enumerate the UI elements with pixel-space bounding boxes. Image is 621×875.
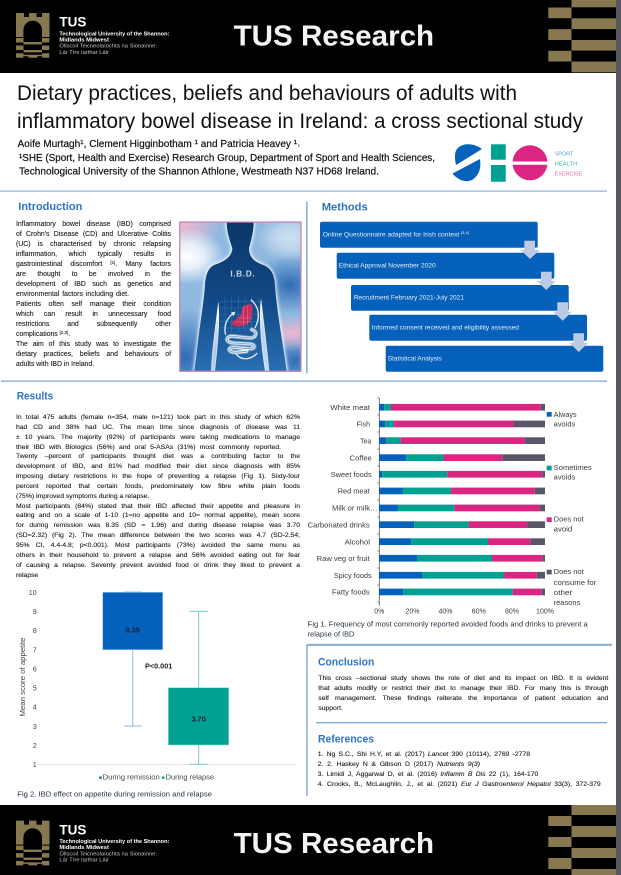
text: results body: In total 475 adults (female n=354, male n=121) took part in this study of which 62%	[16, 414, 300, 421]
bar: tea	[379, 437, 545, 444]
bar labels: Tea	[360, 436, 372, 446]
banner heading: TUS Research	[234, 828, 434, 860]
x axis labels: 20%	[405, 608, 420, 615]
x axis labels	[374, 608, 554, 615]
heading: Methods: Methods	[322, 202, 368, 214]
text: introduction body: are thought to be involved in the	[16, 271, 171, 278]
step 3: recruitment	[351, 285, 569, 311]
text: results body: of causing a relapse. Seventy prevent avoided food or drink they liked to prevent a	[16, 562, 300, 569]
bar: carbonated drinks	[379, 521, 545, 528]
text: results body: others in their household to prevent a relapse and 56% avoided eating out for fear	[16, 552, 300, 559]
heading: References: References	[318, 734, 374, 746]
authors and affiliation	[18, 139, 435, 178]
text: introduction body: which can result in unnecessary food	[16, 311, 171, 318]
chart legend: avoids	[554, 420, 575, 429]
x axis labels: 0%	[374, 608, 384, 615]
icon: TUS castle logo	[16, 13, 49, 58]
text: introduction body: Patients often self manage their condition	[16, 301, 171, 308]
x axis	[38, 764, 296, 769]
authors and affiliation: Aoife Murtagh¹, Clement Higginbotham ¹ and Patricia Heavey ¹˒	[18, 139, 300, 150]
step 2: ethical approval	[337, 253, 554, 279]
icon: TUS castle logo	[16, 821, 49, 865]
text: results body: 95% CI, 4.4-4.8; p<0.001). Most participants (73%) avoided the same menu as	[16, 542, 300, 549]
y axis labels and title: 6	[33, 664, 37, 674]
chart legend: During remission	[103, 773, 160, 782]
figure 2 caption: Fig 2. IBD effect on appetite during remission and relapse	[17, 792, 212, 799]
text: results body: eating and on a scale of 1-10 (1=no appetite and 10= normal appetite), mean score	[16, 512, 300, 519]
text: introduction body: gastrointestinal discomfort [1]. Many factors	[16, 260, 171, 268]
chart: figure 2 appetite box plot	[17, 588, 296, 799]
x axis labels: 40%	[438, 608, 453, 615]
panel: references	[306, 722, 607, 796]
bar: alcohol	[379, 538, 545, 545]
authors and affiliation: ¹SHE (Sport, Health and Exercise) Research Group, Department of Sport and Health Sciences,	[19, 153, 435, 164]
chart legend: consume for	[554, 578, 597, 587]
y axis labels and title: 7	[33, 646, 37, 654]
heading: Conclusion: Conclusion	[318, 657, 374, 669]
chart legend: During relapse	[166, 773, 214, 782]
step 5: statistical analysis	[386, 346, 603, 372]
bar: fatty foods	[379, 589, 545, 595]
footer banner	[0, 805, 616, 875]
text: introduction body: Inflammatory bowel disease (IBD) comprised	[16, 221, 171, 228]
text: results body: percent reported that certain foods, predominately low fibre white plain foods	[16, 483, 300, 490]
text: introduction body: The aim of this study was to investigate the	[16, 341, 171, 348]
arrow: step 3 to 4	[553, 302, 572, 321]
text: reference list	[318, 751, 601, 788]
bar labels: Spicy foods	[334, 571, 372, 580]
text: results body: for during remission was 8.35 (SD = 1.96) and during disease relapse was 3.70	[16, 522, 300, 529]
step 5: statistical analysis: Statistical Analysis	[388, 356, 442, 363]
figure 1 caption	[308, 622, 588, 639]
y axis labels and title: Mean score of appetite	[18, 637, 27, 717]
text: reference list: 4. Crooks, B., McLaughlin, J., et al. (2021) Eur J Gastroenterol Hepatol 33(3), 372-379	[318, 781, 601, 788]
text: conclusion body: that adults modify or restrict their diet to manage their IBD. For many this is through	[318, 685, 608, 692]
TUS logo wordmark: Lár Tíre Iarthar Láir	[59, 858, 109, 864]
chart: figure 1 avoided foods stacked bars	[308, 398, 597, 639]
bar labels: Fish	[357, 420, 370, 428]
bar: raw veg or fruit	[379, 555, 545, 562]
TUS logo wordmark: Midlands Midwest	[59, 37, 109, 43]
chart legend	[547, 410, 597, 607]
text: results body	[16, 414, 300, 578]
text: conclusion body	[318, 675, 608, 712]
text: results body: (SD=2.32) (Fig 2). The mean difference between the two scores was 4.7 (SD-2.54;	[16, 532, 300, 539]
panel: conclusion	[306, 643, 612, 723]
icon: SHE logo	[452, 144, 583, 182]
text: reference list: 3. Limidi J, Aggarwal D, et al. (2016) Inflamm B Dis 22 (1), 164-170	[318, 771, 538, 778]
bar: spicy foods	[379, 572, 545, 579]
step 4: informed consent: Informed consent received and eligibility assessed	[372, 325, 519, 332]
text: introduction body: development of IBD such as genetics and	[16, 281, 171, 288]
text: conclusion body: self management. These findings reiterate the importance of patient education and	[318, 695, 608, 702]
bar: red meat	[379, 488, 545, 494]
text: introduction body: dietary practices, beliefs and behaviours of	[16, 351, 171, 358]
text: conclusion body: This cross –sectional study shows the role of diet and its impact on IBD. It is evident	[318, 675, 608, 682]
text: results body: Most participants (84%) stated that their IBD affected their appetite and pleasure in	[16, 503, 300, 510]
poster title	[17, 81, 583, 133]
chart legend: Does not	[554, 567, 584, 576]
banner heading: TUS Research	[234, 20, 434, 52]
text: introduction body: inflammation, which typically results in	[16, 251, 171, 258]
text: introduction body: complications [2,3].	[16, 330, 70, 338]
bar: coffee	[379, 454, 545, 461]
text: results body: (75%) improved symptoms during a relapse.	[16, 493, 149, 500]
step 1: questionnaire: [3,4]	[461, 230, 469, 235]
y axis labels and title: 1	[33, 760, 37, 769]
heading: Introduction: Introduction	[18, 201, 82, 213]
bar: sweet foods	[379, 471, 545, 478]
step 1: questionnaire	[320, 222, 538, 248]
axis line	[378, 398, 379, 606]
box: during remission	[103, 592, 163, 726]
bar labels: Carbonated drinks	[308, 520, 370, 529]
arrow: step 2 to 3	[537, 272, 556, 290]
poster title: inflammatory bowel disease in Ireland: a cross sectional study	[17, 109, 583, 133]
y axis labels and title: 5	[33, 684, 37, 692]
y axis labels and title: 2	[33, 741, 37, 750]
panel: results text	[16, 391, 300, 578]
text: results body: Twenty –percent of participants thought diet was a contributing factor to the	[16, 453, 300, 460]
x axis labels: 60%	[472, 608, 486, 615]
text: results body: had CD and 38% had UC. The mean time since diagnosis of disease was 11	[16, 424, 300, 431]
TUS logo wordmark: TUS	[59, 822, 86, 837]
y axis labels and title	[18, 588, 37, 769]
significance label: P<0.001	[145, 664, 172, 671]
text: reference list: 2. 2. Haskey N & Gibson D (2017) Nutrients 9(3)	[318, 761, 480, 768]
TUS logo wordmark: Technological University of the Shannon:	[59, 839, 170, 845]
bar: fish	[379, 421, 545, 427]
bar: milk or milk products	[379, 505, 545, 511]
box: during remission: 8.35	[126, 626, 140, 635]
authors and affiliation: Technological University of the Shannon Athlone, Westmeath N37 HD68 Ireland.	[19, 167, 379, 178]
text: introduction body: adults with IBD in Ireland.	[16, 361, 94, 368]
box: during relapse: 3.70	[192, 715, 206, 724]
icon: SHE logo: EXERCISE	[555, 172, 583, 178]
heading: Results: Results	[17, 391, 53, 403]
poster title: Dietary practices, beliefs and behaviours of adults with	[17, 81, 517, 105]
text: results body: ± 10 years. The majority (92%) of participants were taking medications to manage	[16, 434, 300, 441]
text: introduction body: environmental factors including diet.	[16, 291, 129, 298]
panel: methods	[320, 202, 604, 372]
TUS logo wordmark	[59, 822, 170, 864]
gold checker pattern	[548, 805, 616, 875]
arrow: step 4 to 5	[569, 333, 588, 352]
stacked bars	[379, 404, 545, 595]
icon: SHE logo: SPORT	[555, 152, 574, 158]
step 2: ethical approval: Ethical Approval November 2020	[339, 263, 436, 270]
bar labels: Red meat	[338, 487, 370, 496]
bar labels	[308, 403, 378, 597]
bar labels: Sweet foods	[331, 470, 372, 479]
icon: SHE logo: HEALTH	[555, 162, 577, 168]
header banner	[0, 0, 616, 73]
x axis labels: 100%	[536, 608, 554, 615]
text: introduction body	[16, 220, 172, 368]
text: results body: relapse	[16, 572, 38, 578]
text: conclusion body: support.	[318, 705, 343, 712]
y axis labels and title: 8	[33, 626, 37, 635]
text: results body: imposing dietary restrictions in the hope of preventing a relapse (Fig 1). Sixty-four	[16, 473, 300, 480]
bar: white meat	[379, 404, 545, 411]
bar labels: Alcohol	[345, 537, 370, 546]
arrow: step 1 to 2	[521, 241, 540, 259]
y axis labels and title: 4	[33, 702, 37, 712]
text: introduction body: (UC) is characterised by chronic relapsing	[16, 241, 171, 248]
TUS logo wordmark	[59, 15, 170, 56]
bar labels: Fatty foods	[332, 588, 370, 597]
text: introduction body: restrictions and subsequently other	[16, 321, 171, 328]
step 3: recruitment: Recruitment February 2021-July 2021	[354, 295, 464, 302]
bar labels: White meat	[330, 403, 370, 412]
TUS logo wordmark: Midlands Midwest	[59, 845, 109, 851]
panel: introduction	[16, 201, 302, 372]
text: results body: development of IBD, and 81% had modified their diet since diagnosis with 85%	[16, 463, 300, 470]
chart legend: Always	[554, 410, 577, 419]
y axis labels and title: 10	[29, 588, 37, 597]
x axis labels: 80%	[505, 608, 519, 615]
TUS logo wordmark: Ollscoil Teicneolaíochta na Sionainne:	[59, 851, 157, 857]
y axis labels and title: 9	[33, 607, 37, 616]
chart legend: avoid	[554, 525, 572, 534]
y axis labels and title: 3	[33, 722, 37, 731]
TUS logo wordmark: Lár Tíre Iarthar Láir	[59, 50, 109, 56]
bar labels: Milk or milk…	[332, 504, 378, 513]
chart legend: reasons	[554, 598, 581, 607]
text: introduction body: of Crohn's Disease (CD) and Ulcerative Colitis	[16, 231, 171, 238]
TUS logo wordmark: Ollscoil Teicneolaíochta na Sionainne:	[59, 44, 157, 50]
chart legend: Sometimes	[554, 463, 592, 472]
bar labels: Coffee	[350, 454, 372, 462]
bar labels: Raw veg or fruit	[317, 554, 370, 563]
title block	[17, 81, 583, 182]
box: during relapse	[168, 611, 229, 764]
gold checker pattern	[548, 0, 616, 72]
TUS logo wordmark: Technological University of the Shannon:	[59, 31, 170, 37]
text: reference list: 1. Ng S.C., Shi H.Y, et al. (2017) Lancet 390 (10114), 2769 -2778	[318, 751, 530, 758]
TUS logo wordmark: TUS	[59, 15, 86, 30]
chart legend	[99, 773, 214, 782]
illustration: I.B.D. body silhouette: I.B.D.	[230, 269, 255, 279]
figure 1 caption: relapse of IBD	[308, 632, 354, 639]
text: results body: their IBD with Biologics (56%) and oral 5-ASAs (31%) most commonly reported.	[16, 444, 281, 451]
chart legend: avoids	[554, 473, 575, 482]
figure 1 caption: Fig 1. Frequency of most commonly reported avoided foods and drinks to prevent a	[308, 622, 588, 629]
step 1: questionnaire: Online Questionnaire adapted for Irish context	[323, 232, 459, 239]
chart legend: other	[554, 588, 573, 597]
step 4: informed consent	[369, 315, 587, 341]
chart legend: Does not	[554, 515, 584, 524]
illustration: I.B.D. body silhouette	[179, 221, 302, 372]
